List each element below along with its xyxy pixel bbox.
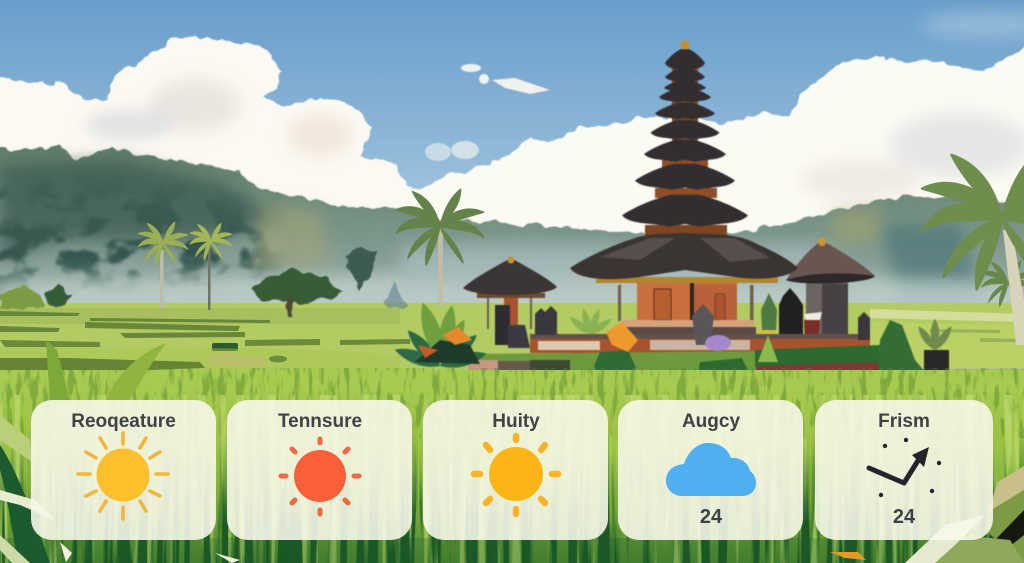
potted plant [915, 319, 955, 374]
palm centre left [190, 223, 232, 310]
rice terraces [0, 303, 1024, 378]
palm centre [396, 189, 484, 306]
clouds: left cumulus [0, 37, 440, 240]
forest hillside [0, 146, 1024, 330]
leaves bottom right [830, 466, 1024, 563]
trees in midground [0, 246, 406, 320]
icon: amber sun [474, 436, 558, 514]
palm small far right [981, 261, 1024, 307]
clouds: centre and right cumulus [410, 45, 1024, 240]
grass clump centre [568, 308, 614, 337]
main temple pagoda [570, 40, 798, 335]
value: 24 [893, 506, 916, 528]
topiary [761, 293, 777, 330]
clouds: right cumulus shading [800, 113, 1024, 200]
temple complex [393, 40, 1024, 393]
flower plant purple [696, 335, 755, 393]
card: Augcy [618, 400, 803, 540]
high wispy haze [920, 11, 1024, 39]
tall leaves left [0, 340, 240, 563]
icon: yellow sun with thin rays [78, 433, 168, 519]
yellow flower plant [758, 327, 778, 362]
icon: red-orange sun [281, 439, 359, 514]
card: Frism [815, 400, 993, 540]
stone statues [535, 304, 870, 345]
garden beds [468, 345, 1024, 388]
tower core [645, 62, 727, 237]
roof tiers [622, 49, 748, 227]
card: Tennsure [227, 400, 412, 540]
gold finial [680, 40, 690, 50]
label: Tennsure [278, 411, 362, 432]
clouds: left cumulus shading [85, 79, 352, 155]
flower plant left [393, 300, 488, 372]
shrub right [878, 320, 925, 378]
icon: clock with arrow hands [869, 438, 941, 497]
temple courtyard wall [530, 334, 870, 353]
icon: blue cloud [666, 443, 756, 496]
background: sky [0, 0, 1024, 330]
value: 24 [700, 506, 723, 528]
label: Augcy [682, 411, 740, 432]
label: Frism [878, 411, 930, 432]
palm left [138, 222, 188, 308]
palm trees [138, 151, 1024, 345]
label: Huity [492, 411, 540, 432]
card: Huity [423, 400, 608, 540]
right small shrine [779, 238, 875, 352]
roof highlights [600, 238, 770, 262]
palm right large [922, 151, 1024, 345]
temple walls [596, 277, 778, 335]
left small shrine [463, 256, 557, 348]
clouds: small wisps [425, 64, 550, 161]
label: Reoqeature [71, 411, 176, 432]
flower plant centre [594, 322, 638, 383]
main roof [570, 233, 798, 279]
foreground rice grass [0, 340, 1024, 563]
card: Reoqeature [31, 400, 216, 540]
